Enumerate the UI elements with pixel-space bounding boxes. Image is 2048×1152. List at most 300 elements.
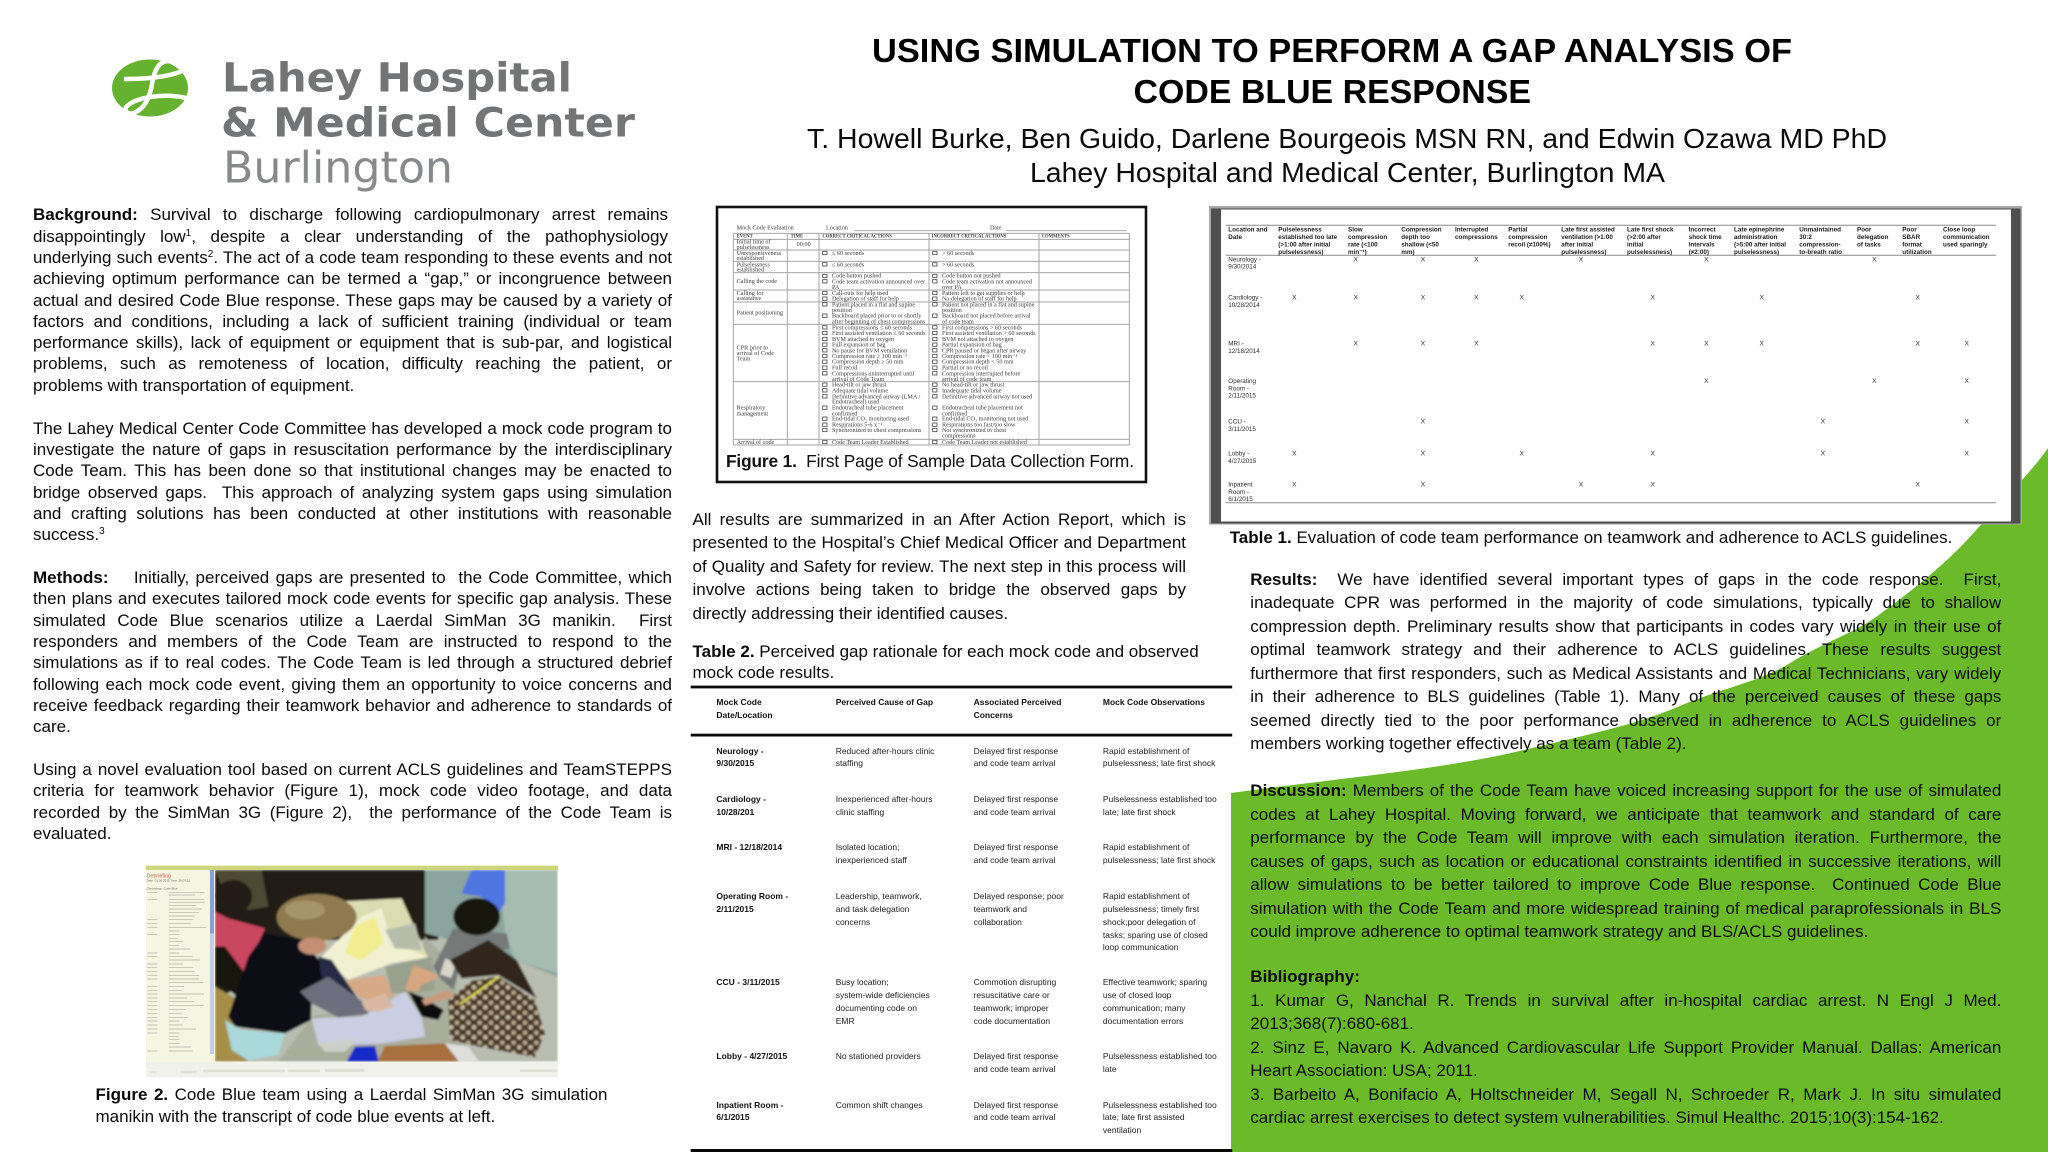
table 2 row: CCU: communication; many — [1103, 1003, 1186, 1013]
table 2 row: Neurology: staffing — [836, 758, 863, 768]
sample form image: management — [737, 411, 768, 417]
table 1 column headers: Late epinephrine — [1734, 227, 1784, 234]
sample form image: Endotracheal tube placement not — [942, 406, 1023, 412]
figure 2 caption — [96, 1085, 608, 1126]
table 2 row: Operating Room: shock;poor delegation of — [1103, 917, 1196, 927]
text block: background: Background: Survival to discharge following cardiopulmonary arrest remains — [33, 205, 668, 224]
sample form image: Endotracheal tube placement — [832, 406, 904, 412]
sample form image: Calling the code — [737, 279, 777, 285]
table 2 row: Cardiology: 10/28/201 — [716, 807, 754, 817]
table 1 row: Lobby: X — [1964, 451, 1969, 458]
table 2 row: Lobby: Pulselessness established too — [1103, 1051, 1217, 1061]
table 2 row: CCU: code documentation — [974, 1016, 1050, 1026]
sample form image: position — [942, 308, 962, 314]
table 2 row: Cardiology: clinic staffing — [836, 807, 884, 817]
figure 2 caption: Figure 2. Code Blue team using a Laerdal SimMan 3G simulation — [96, 1085, 608, 1104]
table 1 row: Neurology: 9/30/2014 — [1228, 264, 1257, 271]
logo: Lahey Hospital & Medical Center Burlington: & Medical Center — [221, 101, 635, 147]
table 2 row: Operating Room: tasks; sparing use of closed — [1103, 930, 1208, 940]
table 2 row: Inpatient Room: and code team arrival — [974, 1112, 1055, 1122]
text block: methods: responders and members of the Code Team are instructed to respond to the — [33, 632, 672, 651]
table 1 row: MRI: MRI - — [1228, 341, 1244, 348]
table 1 column headers: Close loop — [1943, 227, 1975, 234]
sample form image: Definitive advanced airway (LMA / — [832, 393, 920, 400]
table 1 row: Operating Room: X — [1872, 378, 1877, 385]
sample form image: Delegation of staff for help — [832, 296, 899, 303]
sample form image: Definitive advanced airway not used — [942, 393, 1032, 400]
text block: discussion: Discussion: Members of the Code Team have voiced increasing support for the use of simulated — [1250, 781, 2001, 800]
table 2 header row: Concerns — [974, 710, 1013, 720]
table 1 column headers: of tasks — [1857, 241, 1881, 248]
sample form image: Full expansion of bag — [832, 342, 886, 349]
table 1 row: Cardiology: Cardiology - — [1228, 295, 1262, 302]
table 1 row: CCU — [1228, 419, 1969, 433]
sample form image: Compression rate ≥ 100 min⁻¹ — [832, 353, 907, 360]
text block: results — [1250, 570, 2002, 753]
table 1 row: Operating Room: Room - — [1228, 385, 1249, 392]
text block: bibliography — [1250, 967, 2001, 1127]
sample form image: Code button pushed — [832, 274, 881, 280]
text block: code committee program: The Lahey Medical Center Code Committee has developed a mock code program to — [33, 419, 672, 438]
sample form image: CORRECT CRITICAL ACTIONS — [822, 234, 892, 239]
text block: methods: care. — [33, 717, 71, 736]
table 1 row: Inpatient Room: X — [1292, 482, 1297, 489]
table 2 row: Lobby — [716, 1051, 1217, 1074]
table 2 row: CCU: teamwork; improper — [974, 1003, 1049, 1013]
table 1 row: Inpatient Room: Inpatient — [1228, 482, 1252, 489]
text block: methods: simulations as if to real codes. The Code Team is led through a structured debrief — [33, 653, 672, 672]
text block: background: actual and desired Code Blue response. These gaps may be caused by a variety of — [33, 290, 672, 310]
sample form image: CPR paused or began after airway — [942, 347, 1027, 354]
table 2 row: Inpatient Room: Pulselessness established too — [1103, 1100, 1217, 1110]
sample form image: pulselessness — [737, 245, 770, 251]
sample form image: Respiratory — [737, 406, 766, 412]
text block: bibliography: Bibliography: — [1250, 967, 1360, 986]
table 2 row: CCU — [716, 977, 1207, 1026]
sample form image: Code Team Leader not established — [942, 440, 1027, 446]
table 1 column headers: Slow — [1348, 227, 1363, 234]
authors and affiliation: T. Howell Burke, Ben Guido, Darlene Bourgeois MSN RN, and Edwin Ozawa MD PhD — [807, 123, 1887, 154]
sample form image: Partial or no recoil — [942, 366, 988, 372]
text block: code committee program: investigate the nature of gaps in resuscitation performance by the interdisciplinary — [33, 440, 672, 459]
table 2 row: Neurology: pulselessness; late first shock — [1103, 758, 1215, 768]
text block: background: disappointingly low1, despite a clear understanding of the pathophysiology — [33, 227, 668, 246]
table 1 row: Cardiology: X — [1650, 295, 1655, 302]
sample form image: > 60 seconds — [942, 262, 975, 268]
table 2 row: Inpatient Room: late; late first assisted — [1103, 1112, 1185, 1122]
table 1 row: Cardiology: X — [1353, 295, 1358, 302]
table 2 row: CCU: CCU - 3/11/2015 — [716, 977, 780, 987]
text block: bibliography: 2. Sinz E, Navaro K. Advanced Cardiovascular Life Support Provider Manual. Dallas: American — [1250, 1038, 2001, 1057]
sample form image: compressions — [942, 434, 976, 440]
text block: discussion: codes at Lahey Hospital. Moving forward, we anticipate that teamwork and standard of care — [1250, 805, 2001, 824]
table 1 row: Neurology: X — [1704, 256, 1709, 263]
table 1 column headers: communication — [1943, 234, 1990, 241]
sample form image: No pause for BVM ventilation — [832, 347, 907, 354]
table 2 row: Cardiology: Cardiology - — [716, 794, 766, 804]
table 1 column headers: SBAR — [1902, 234, 1921, 241]
table 1 row: Lobby: 4/27/2015 — [1228, 458, 1257, 465]
table 1 row: CCU: X — [1821, 419, 1826, 426]
table 1 row: Lobby: Lobby - — [1228, 451, 1249, 458]
figure 2 caption: manikin with the transcript of code blue events at left. — [96, 1107, 495, 1126]
text block: methods: then plans and executes tailored mock code events for specific gap analysis. These — [33, 589, 672, 608]
sample form image: Full recoil — [832, 366, 858, 372]
text block: discussion: causes of gaps, such as location or educational constraints identified in successive iterations, will — [1250, 852, 2001, 871]
table 1 column headers: pulselessness) — [1734, 249, 1779, 256]
table 2 row: Operating Room: Operating Room - — [716, 891, 788, 901]
text block: results: seemed directly tied to the poor performance observed in adherence to ACLS guidelines or — [1250, 711, 2001, 730]
sample form image: First assisted ventilation > 60 seconds — [942, 331, 1036, 337]
table 1 column headers: to-breath ratio — [1799, 249, 1842, 256]
table 2 row: Neurology: 9/30/2015 — [716, 758, 754, 768]
table 2 caption: mock code results. — [692, 663, 834, 682]
sample form image: Synchronized to chest compressions — [832, 428, 922, 434]
table 2 row: Lobby: late — [1103, 1064, 1117, 1074]
table 1 row: Cardiology — [1228, 295, 1920, 309]
table 1 column headers: min⁻¹) — [1348, 249, 1367, 256]
table 1 row: Lobby: X — [1650, 451, 1655, 458]
sample form image: No delegation of staff for help — [942, 296, 1017, 303]
sample form image: arrival of code team — [942, 376, 992, 383]
table 1 column headers: administration — [1734, 234, 1778, 241]
table 2 row: CCU: Busy location; — [836, 977, 889, 987]
table 1 row: MRI: X — [1759, 341, 1764, 348]
green background swoosh — [1231, 448, 2048, 1152]
sample form image: Compression rate < 100 min⁻¹ — [942, 353, 1017, 360]
table 2 row: Lobby: Lobby - 4/27/2015 — [716, 1051, 787, 1061]
table 2 row: Operating Room: pulselessness; timely first — [1103, 904, 1199, 914]
table 2 rules — [691, 686, 1232, 1152]
icon: green logo mark — [112, 60, 188, 116]
table 1 row: CCU: CCU - — [1228, 419, 1246, 426]
table 2 row: CCU: Effective teamwork; sparing — [1103, 977, 1207, 987]
table 1 column headers: (>1:00 after initial — [1278, 241, 1331, 248]
table 1 column headers: Location and — [1228, 227, 1267, 234]
text block: bibliography: 2013;368(7):680-681. — [1250, 1014, 1414, 1033]
table 2 row: Neurology: Rapid establishment of — [1103, 746, 1189, 756]
text block: discussion: allow simulations to be better tailored to improve Code Blue response. Continued Code Blue — [1250, 875, 2001, 894]
sample form image: 00:00 — [797, 242, 811, 248]
text block: bibliography: 1. Kumar G, Nanchal R. Trends in survival after in-hospital cardiac arrest. N Engl J Med. — [1250, 991, 2001, 1010]
table 1 row: Operating Room — [1228, 378, 1969, 400]
table 2 header row: Mock Code Observations — [1103, 697, 1205, 707]
table 1 row: MRI: 12/18/2014 — [1228, 348, 1260, 355]
sample form image: Compression interrupted before — [942, 370, 1021, 377]
table 1 row: Neurology — [1228, 256, 1877, 271]
table 1 column headers: (>5:00 after initial — [1734, 241, 1786, 248]
table 2 row: Inpatient Room: Delayed first response — [974, 1100, 1058, 1110]
table 2 row: Operating Room: collaboration — [974, 917, 1022, 927]
table 1 row: Neurology: X — [1421, 256, 1426, 263]
panel: table 1 team performance matrix — [1209, 206, 2022, 524]
table 1 row: Lobby: X — [1519, 451, 1524, 458]
table 2 caption — [692, 642, 1199, 682]
sample form image: Head-tilt or jaw thrust — [832, 383, 887, 389]
table 2 row: Cardiology: Delayed first response — [974, 794, 1058, 804]
text block: background — [33, 205, 672, 395]
table 2 row: Operating Room: Rapid establishment of — [1103, 891, 1189, 901]
table 2 row: Operating Room: teamwork and — [974, 904, 1027, 914]
text block: bibliography: Heart Association: USA; 2011. — [1250, 1061, 1478, 1080]
table 1 column headers: used sparingly — [1943, 241, 1988, 248]
title: CODE BLUE RESPONSE — [1134, 74, 1531, 111]
text block: methods: Methods: Initially, perceived gaps are presented to the Code Committee, which — [33, 568, 672, 587]
table 1 column headers — [1228, 227, 1990, 256]
sample form image: Calling for — [737, 290, 764, 297]
table 1 row: Inpatient Room — [1228, 482, 1920, 503]
table 1 row: MRI: X — [1474, 341, 1479, 348]
logo: Lahey Hospital & Medical Center Burlington: Lahey Hospital — [222, 56, 572, 102]
sample form image: First assisted ventilation ≤ 60 seconds — [832, 331, 926, 337]
sample form image: Call-outs for help used — [832, 290, 888, 297]
sample form image — [733, 226, 1129, 446]
table 1 column headers: recoil (≠100%) — [1508, 241, 1551, 248]
text block: code committee program: Code Team. This has been done so that institutional changes may be enacted to — [33, 461, 672, 480]
sample form image: over PA — [942, 285, 962, 291]
text block: evaluation tool: evaluated. — [33, 824, 111, 843]
sample form image: COMMENTS — [1042, 234, 1070, 239]
table 1 row: Inpatient Room: 6/1/2015 — [1228, 496, 1253, 503]
table 1 row: CCU: 3/11/2015 — [1228, 426, 1256, 433]
table 1 row: MRI: X — [1704, 341, 1709, 348]
table 1 row: MRI: X — [1650, 341, 1655, 348]
text block: discussion: simulation with the Code Team and more widespread training of medical paraprofessionals in BLS — [1250, 899, 2001, 918]
table 1 column headers: pulselessness) — [1627, 249, 1672, 256]
table 2 row: Lobby: and code team arrival — [974, 1064, 1055, 1074]
text block: results: optimal teamwork strategy and their adherence to ACLS guidelines. These results suggest — [1250, 640, 2001, 659]
table 1 column headers: shallow (<50 — [1401, 241, 1439, 248]
table 2 row: Operating Room: 2/11/2015 — [716, 904, 754, 914]
table 1 column headers: intervals — [1689, 241, 1715, 248]
table 1 column headers: compressions — [1455, 234, 1498, 241]
authors and affiliation — [807, 123, 1887, 188]
sample form image: EVENT — [737, 234, 754, 239]
table 1 column headers: rate (<100 — [1348, 241, 1378, 248]
table 1 column headers: ventilation (>1:00 — [1561, 234, 1613, 241]
table 1 row: Inpatient Room: Room - — [1228, 489, 1249, 496]
table 1 row: Cardiology: X — [1474, 295, 1479, 302]
table 1 row: Inpatient Room: X — [1579, 482, 1584, 489]
table 1 row: Inpatient Room: X — [1421, 482, 1426, 489]
table 2 row: Neurology — [716, 746, 1216, 768]
table 1 row: Operating Room: Operating — [1228, 378, 1256, 385]
table 1 row: Operating Room: 2/11/2015 — [1228, 393, 1256, 400]
table 1 row: Lobby — [1228, 451, 1969, 465]
sample form image: established — [737, 256, 764, 262]
table 2 header row: Perceived Cause of Gap — [836, 697, 933, 707]
table 1 row: Neurology: X — [1474, 256, 1479, 263]
table 2 caption: Table 2. Perceived gap rationale for each mock code and observed — [692, 642, 1199, 660]
figure 2 photo: code team around simulation manikin: Date: 01.06.2015 Time: 16:03:11 — [147, 879, 190, 883]
table 1 row: Operating Room: X — [1704, 378, 1709, 385]
text block: results: Results: We have identified several important types of gaps in the code response. First, — [1250, 570, 2001, 588]
table 1 row: MRI: X — [1353, 341, 1358, 348]
sample form image: Partial expansion of bag — [942, 342, 1002, 349]
sample form image: Backboard not placed before arrival — [942, 313, 1031, 320]
table 1 column headers: mm) — [1401, 249, 1415, 256]
sample form image: position — [832, 308, 852, 314]
table 2 row: Operating Room: loop communication — [1103, 942, 1178, 952]
table 1 column headers: Unmaintained — [1799, 227, 1841, 234]
text block: discussion — [1250, 781, 2001, 941]
sample form image: Location — [826, 226, 848, 232]
table 1 column headers: Incorrect — [1689, 227, 1716, 234]
table 2 row: Neurology: Reduced after-hours clinic — [836, 746, 934, 756]
table 1 column headers: Interrupted — [1455, 227, 1488, 234]
text block: after action report: All results are summarized in an After Action Report, which is — [692, 510, 1186, 529]
table 2 row: CCU: documenting code on — [836, 1003, 917, 1013]
table 1 caption: Table 1. Evaluation of code team performance on teamwork and adherence to ACLS guidelines. — [1230, 528, 1952, 547]
text block: methods — [33, 568, 672, 736]
table 2 row: MRI: and code team arrival — [974, 855, 1055, 865]
table 1 column headers: format — [1902, 241, 1923, 248]
table 1 column headers: (>2:00 after — [1627, 234, 1661, 241]
table 2 row: CCU: Commotion disrupting — [974, 977, 1056, 987]
table 2 row: Lobby: No stationed providers — [836, 1051, 921, 1061]
sample form image: Adequate tidal volume — [832, 388, 888, 394]
table 2 row: Operating Room: concerns — [836, 917, 870, 927]
sample form image: Patient positioning — [737, 311, 783, 317]
table 2 row: Inpatient Room: ventilation — [1103, 1125, 1141, 1135]
sample form image: Inadequate tidal volume — [942, 388, 1002, 394]
sample form image: Mock Code Evaluation — [737, 226, 794, 232]
text block: bibliography: 3. Barbeito A, Bonifacio A, Holtschneider M, Segall N, Schroeder R, Mark J. In situ simulated — [1250, 1085, 2001, 1104]
table 1 column headers: initial — [1627, 241, 1644, 248]
sample form image: First compressions ≤ 60 seconds — [832, 325, 913, 331]
sample form image: Code Team Leader Established — [832, 440, 909, 446]
text block: methods: receive feedback regarding their teamwork behavior and adherence to standards of — [33, 696, 672, 715]
text block: background: underlying such events2. The act of a code team responding to these events and not — [33, 248, 672, 267]
figure 2 photo: code team around simulation manikin — [146, 866, 558, 1077]
table 1 column headers: after initial — [1561, 241, 1593, 248]
table 2 row: Inpatient Room: 6/1/2015 — [716, 1112, 749, 1122]
table 1 row: Cardiology: 10/28/2014 — [1228, 302, 1260, 309]
text block: evaluation tool — [33, 760, 672, 843]
sample form image: BVM attached to oxygen — [832, 337, 894, 343]
table 1 row: MRI — [1228, 341, 1969, 355]
table 1 column headers: compression- — [1799, 241, 1841, 248]
table 1 row: Lobby: X — [1292, 451, 1297, 458]
sample form image: after beginning of chest compressions — [832, 318, 926, 325]
table 2 row: Cardiology: Pulselessness established too — [1103, 794, 1217, 804]
sample form image: of code team — [942, 318, 974, 325]
table 1 column headers: pulselessness) — [1561, 249, 1606, 256]
sample form image: arrival of Code — [737, 350, 774, 357]
sample form image: Unresponsiveness — [737, 251, 782, 257]
text block: after action report: of Quality and Safety for review. The next step in this process will — [692, 557, 1186, 576]
text block: methods: following each mock code event, giving them an opportunity to voice concerns and — [33, 675, 672, 694]
text block: evaluation tool: recorded by the SimMan 3G (Figure 2), the performance of the Code Team is — [33, 803, 672, 822]
panel: figure 1 data collection form — [717, 207, 1146, 482]
table 1 row: CCU: X — [1964, 419, 1969, 426]
table 1 row: MRI: X — [1915, 341, 1920, 348]
table 2 header row: Date/Location — [716, 710, 773, 720]
text block: results: in their adherence to BLS guidelines (Table 1). Many of the perceived causes of these gaps — [1250, 687, 2001, 706]
table 1 column headers: Partial — [1508, 227, 1528, 234]
title — [872, 33, 1792, 111]
table 2 row: Inpatient Room: Common shift changes — [836, 1100, 923, 1110]
table 2 row: MRI: Isolated location; — [836, 842, 899, 852]
text block: discussion: performance by the Code Team will improve with each simulation iteration. Furthermore, the — [1250, 828, 2001, 847]
table 1 row: Cardiology: X — [1915, 295, 1920, 302]
text block: results: inadequate CPR was performed in the majority of code simulations, typically due to shallow — [1250, 593, 2001, 612]
table 1 row: Neurology: X — [1579, 256, 1584, 263]
text block: code committee program — [33, 419, 672, 544]
table 1 column headers: 30:2 — [1799, 234, 1812, 241]
sample form image: BVM not attached to oxygen — [942, 337, 1013, 343]
logo: Lahey Hospital & Medical Center Burlington — [112, 56, 635, 194]
table 2 row: Operating Room — [716, 891, 1208, 952]
table 1 row: MRI: X — [1421, 341, 1426, 348]
logo: Lahey Hospital & Medical Center Burlington: Burlington — [223, 143, 453, 194]
sample form image: Patient not placed in a flat and supine — [942, 301, 1035, 308]
table 1 row: Operating Room: X — [1964, 378, 1969, 385]
sample form image: Not synchronized to chest — [942, 428, 1006, 434]
table 2 row: Neurology: Neurology - — [716, 746, 764, 756]
table 1 row: Lobby: X — [1821, 451, 1826, 458]
text block: evaluation tool: Using a novel evaluation tool based on current ACLS guidelines and TeamSTEPPS — [33, 760, 672, 779]
text block: evaluation tool: criteria for teamwork behavior (Figure 1), mock code video footage, and data — [33, 781, 672, 800]
table 2 row: CCU: documentation errors — [1103, 1016, 1183, 1026]
sample form image: Arrival of code — [737, 439, 775, 446]
text block: results: compression depth. Preliminary results show that participants in codes vary widely in their use of — [1250, 617, 2001, 636]
text block: background: achieving optimum performance can be termed a “gap,” or incongruence between — [33, 269, 672, 288]
table 1 row: Cardiology: X — [1759, 295, 1764, 302]
table 2 row: MRI: Delayed first response — [974, 842, 1058, 852]
sample form image: First compressions > 60 seconds — [942, 325, 1023, 331]
table 2 row: MRI — [716, 842, 1216, 865]
sample form image: TIME — [791, 234, 803, 239]
title: USING SIMULATION TO PERFORM A GAP ANALYSIS OF — [872, 33, 1792, 70]
text block: results: furthermore that first responders, such as Medical Assistants and Medical Technicians, vary widely — [1250, 664, 2001, 683]
sample form image: Compression depth ≥ 50 mm — [832, 360, 904, 366]
text block: discussion: could improve adherence to optimal teamwork strategy and BLS/ACLS guidelines. — [1250, 922, 1868, 941]
table 2 row: Cardiology: Inexperienced after-hours — [836, 794, 933, 804]
table 2 header row — [716, 697, 1205, 720]
text block: after action report: directly addressing their identified causes. — [692, 604, 1008, 623]
sample form image: No head-tilt or jaw thrust — [942, 383, 1005, 389]
table 2 row: CCU: system-wide deficiencies — [836, 990, 930, 1000]
figure 2 photo: code team around simulation manikin: Chronology: Code Blue — [147, 887, 178, 891]
table 1 column headers: Pulselessness — [1278, 227, 1322, 234]
table 2 row: Operating Room: Delayed response; poor — [974, 891, 1064, 901]
text block: after action report — [692, 510, 1186, 623]
table 1 column headers: Poor — [1857, 227, 1871, 234]
table 1 column headers: pulselessness) — [1278, 249, 1323, 256]
sample form image: Respirations 5-6 x⁻¹ — [832, 422, 882, 429]
table 1 column headers: Late first shock — [1627, 227, 1674, 234]
table 1 row: Lobby: X — [1421, 451, 1426, 458]
sample form image: Code team activation announced over — [832, 279, 925, 285]
table 2 row: Operating Room: Leadership, teamwork, — [836, 891, 922, 901]
sample form image: Date — [990, 226, 1002, 232]
sample form image: Compressions uninterrupted until — [832, 371, 915, 377]
table 1 column headers: Late first assisted — [1561, 227, 1615, 234]
table 2 row: CCU: EMR — [836, 1016, 855, 1026]
sample form image: Pulselessness — [737, 262, 770, 268]
sample form image: established — [737, 268, 764, 274]
text block: after action report: presented to the Hospital’s Chief Medical Officer and Department — [692, 533, 1186, 552]
table 1 row: MRI: X — [1964, 341, 1969, 348]
sample form image: Compression depth < 50 mm — [942, 360, 1014, 366]
sample form image: ≤ 60 seconds — [832, 251, 865, 257]
sample form image: End-tidal CO₂ monitoring used — [832, 417, 909, 423]
sample form image: arrival of Code Team — [832, 376, 884, 383]
table 1 column headers: Compression — [1401, 227, 1442, 234]
table 1 row: Cardiology: X — [1519, 295, 1524, 302]
table 1 row: Inpatient Room: X — [1650, 482, 1655, 489]
